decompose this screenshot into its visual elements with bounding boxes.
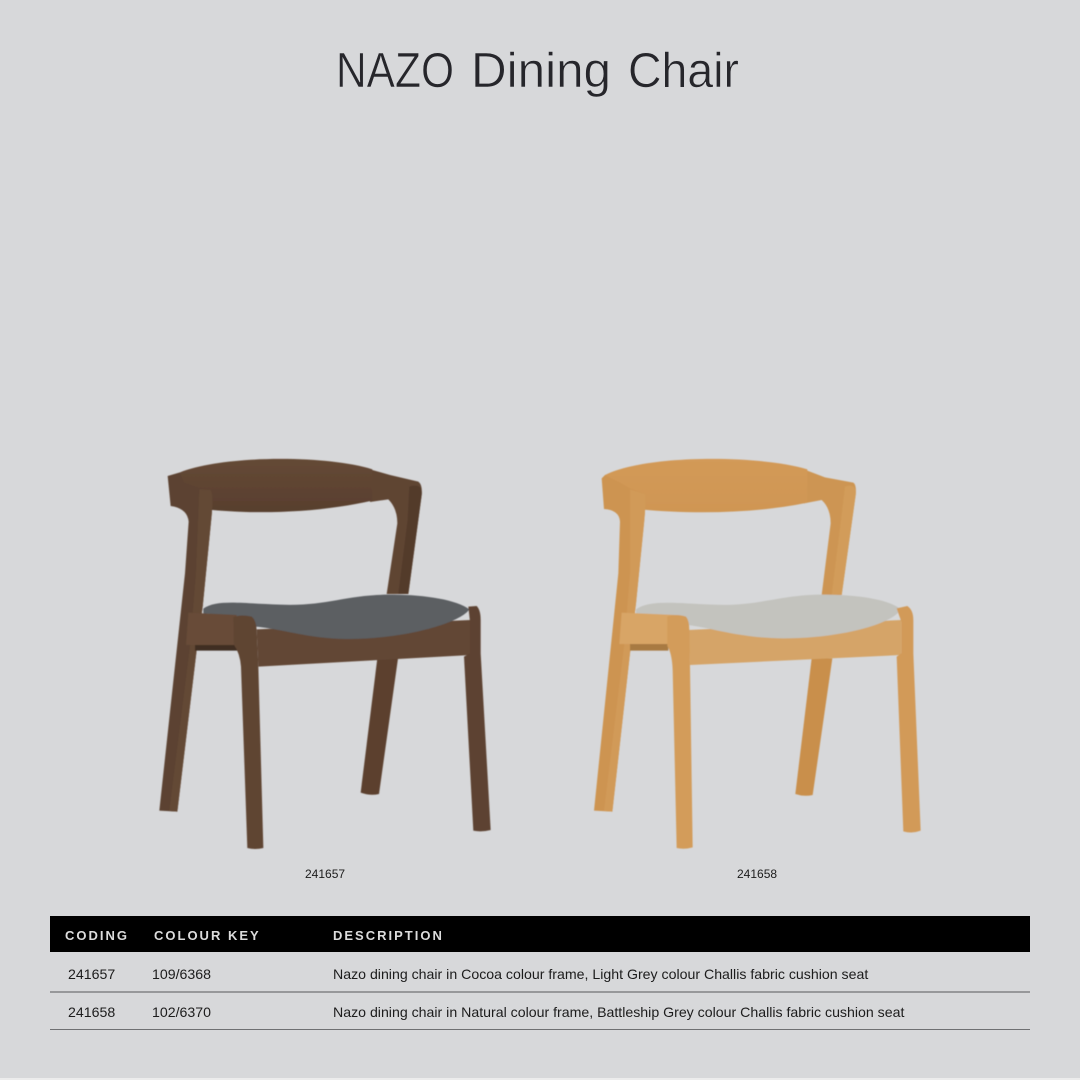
row 1 code: 241657 — [68, 966, 115, 982]
header: coding: CODING — [65, 928, 129, 943]
title — [336, 44, 739, 98]
caption: 241657: 241657 — [305, 867, 345, 881]
front left leg — [667, 615, 693, 849]
front right leg — [464, 606, 491, 831]
front left leg — [233, 615, 263, 849]
chair: Natural frame 241658 — [594, 459, 921, 849]
left back upright and leg — [159, 472, 212, 812]
rear right leg — [361, 658, 398, 795]
row 1 colour key: 109/6368 — [152, 966, 211, 982]
right back upright — [804, 469, 856, 595]
side rail — [186, 613, 237, 645]
header: description: DESCRIPTION — [333, 928, 444, 943]
title: Dining — [471, 44, 611, 98]
front right leg — [897, 606, 921, 833]
caption: 241658: 241658 — [737, 867, 777, 881]
bottom edge strip — [0, 1078, 1080, 1080]
seat rail — [257, 620, 471, 667]
chair: Cocoa frame 241657 — [159, 459, 491, 849]
backrest — [605, 459, 807, 512]
left back upright and leg — [594, 475, 645, 812]
header: colour key: COLOUR KEY — [154, 928, 261, 943]
table — [50, 916, 1030, 1030]
row divider — [50, 991, 1030, 993]
seat rail — [689, 620, 901, 665]
row 2 code: 241658 — [68, 1004, 115, 1020]
side rail — [619, 613, 675, 644]
title: NAZO — [336, 44, 454, 98]
seat cushion — [636, 595, 901, 638]
title: Chair — [628, 44, 739, 98]
row 2 colour key: 102/6370 — [152, 1004, 211, 1020]
row 1 description: Nazo dining chair in Cocoa colour frame, Light Grey colour Challis fabric cushion seat — [333, 966, 868, 982]
back seat side rail shadow — [630, 644, 668, 651]
back seat side rail shadow — [195, 644, 238, 651]
rear right leg — [795, 658, 832, 796]
bottom rule — [50, 1029, 1030, 1030]
right back upright — [370, 469, 422, 594]
backrest — [180, 459, 372, 512]
row 2 description: Nazo dining chair in Natural colour frame, Battleship Grey colour Challis fabric cushion seat — [333, 1004, 904, 1020]
table header bar — [50, 916, 1030, 952]
seat cushion — [203, 595, 469, 639]
